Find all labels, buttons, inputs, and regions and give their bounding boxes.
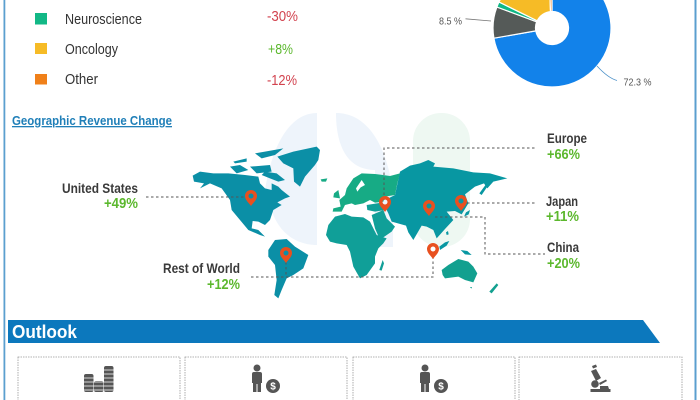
label 8.5 %	[439, 16, 491, 28]
outlook card 2: person with money	[185, 357, 347, 400]
label: europe	[547, 130, 587, 163]
label: united states	[62, 180, 138, 212]
heading: geographic revenue change: Geographic Revenue Change	[12, 113, 172, 128]
label: rest of world	[163, 260, 240, 293]
leader lines	[146, 148, 545, 277]
outlook card 3: person with money	[353, 357, 515, 400]
label 72.3 %: 72.3 %	[624, 76, 652, 88]
donut chart	[439, 0, 652, 88]
location pins	[245, 190, 467, 263]
outlook card 1: coins	[18, 357, 180, 400]
label: europe: Europe	[547, 130, 587, 146]
label 72.3 %	[597, 66, 652, 88]
outlook card 4: microscope	[519, 357, 682, 400]
label: united states: United States	[62, 180, 138, 196]
label 8.5 %: 8.5 %	[439, 16, 462, 28]
label: united states: +49%	[104, 196, 138, 212]
label: china: China	[547, 239, 579, 255]
other row: Other	[65, 72, 98, 88]
label: japan: Japan	[546, 193, 578, 209]
pin: europe	[379, 196, 391, 212]
oncology row: Oncology	[65, 42, 119, 58]
world map	[193, 147, 507, 298]
label: rest of world: Rest of World	[163, 260, 240, 276]
icon: person and coin	[252, 364, 280, 393]
label: japan: +11%	[546, 209, 579, 225]
icon: coin stacks	[84, 366, 114, 392]
neuroscience row: -30%	[267, 9, 298, 25]
label: china: +20%	[547, 256, 580, 272]
icon: microscope	[590, 364, 610, 392]
label: rest of world: +12%	[207, 277, 240, 293]
pin: southeast asia	[427, 243, 439, 259]
asia and oceania	[387, 160, 507, 293]
outlook banner	[8, 320, 660, 343]
pin: japan	[455, 195, 467, 211]
africa and middle east	[326, 203, 395, 278]
europe	[321, 173, 400, 212]
outlook banner: Outlook	[12, 322, 78, 342]
icon: person and coin	[420, 364, 448, 393]
label: europe: +66%	[547, 147, 580, 163]
pin: china	[423, 200, 435, 216]
neuroscience row	[35, 9, 298, 28]
pin: united states	[245, 190, 257, 206]
region labels	[62, 130, 587, 293]
south america	[268, 239, 308, 298]
neuroscience row: Neuroscience	[65, 12, 142, 28]
icon: person and coin: $	[270, 382, 276, 392]
other row	[35, 72, 297, 89]
other row: -12%	[267, 73, 297, 89]
oncology row: +8%	[268, 42, 293, 58]
icon: person and coin: $	[438, 382, 444, 392]
label: china	[547, 239, 580, 272]
north america	[193, 147, 320, 237]
legend: therapeutic areas	[35, 9, 298, 89]
map background shapes	[265, 113, 470, 247]
oncology row	[35, 42, 293, 58]
label: japan	[546, 193, 579, 225]
pin: rest of world	[280, 247, 292, 263]
